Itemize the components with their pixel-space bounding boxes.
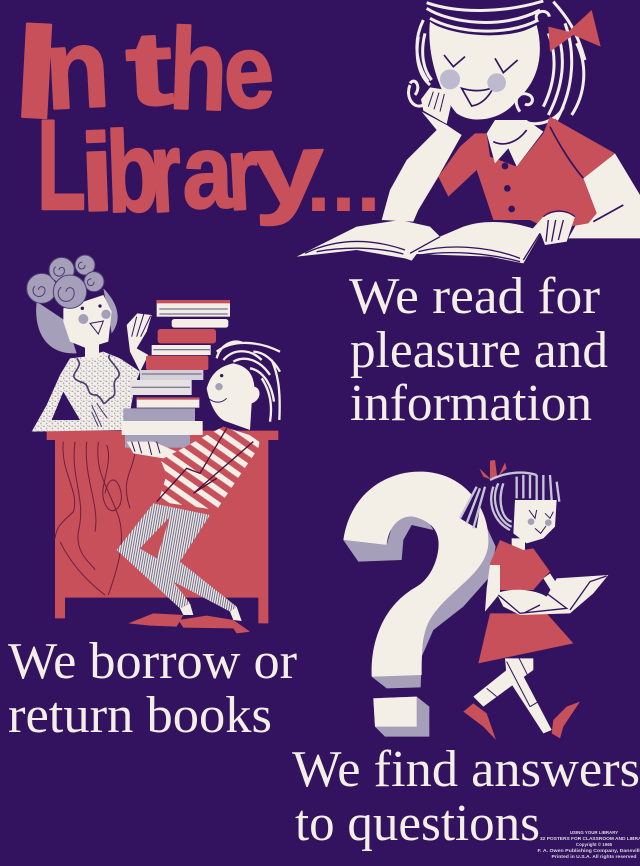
title: b [104, 107, 161, 237]
dress [438, 117, 615, 230]
copyright note: USING YOUR LIBRARY [570, 830, 618, 835]
text: we borrow [8, 633, 297, 744]
text: we borrow: We borrow or [8, 633, 297, 690]
shoes [128, 613, 183, 627]
title: r [224, 114, 261, 232]
hand on cheek [421, 87, 451, 124]
title: ... [306, 131, 381, 231]
copyright note: Printed in U.S.A. All rights reserved [552, 854, 637, 859]
question mark [343, 472, 488, 677]
bodice and skirt [478, 540, 573, 663]
text: we read: information [350, 375, 592, 432]
ribbon [479, 460, 507, 481]
buttons [502, 163, 508, 169]
title: n [42, 4, 112, 134]
stack of books [122, 300, 230, 448]
title: L [37, 93, 86, 237]
neck and collar [487, 120, 543, 167]
text: we read: We read for [349, 268, 600, 325]
eyes and mouth [444, 55, 518, 106]
question mark shadow [343, 513, 496, 688]
title: i [78, 110, 117, 234]
title: y [251, 113, 326, 227]
hair [409, 1, 585, 124]
feet [180, 603, 242, 621]
copyright note: Copyright © 1965 [576, 842, 613, 847]
text: we find [292, 741, 640, 852]
illustration: girl reading [297, 1, 640, 263]
title: a [181, 112, 234, 231]
title: h [167, 6, 230, 135]
text: we find: We find answers [292, 741, 640, 798]
text: we borrow: return books [8, 687, 272, 744]
hair [460, 472, 560, 533]
book [297, 220, 542, 263]
bow [548, 10, 601, 52]
face [513, 500, 557, 543]
text: we read: pleasure and [350, 322, 608, 379]
copyright note: F. A. Owen Publishing Company, Dansville [538, 848, 640, 853]
title: t [123, 10, 176, 129]
arm right [568, 153, 640, 238]
cheeks [440, 69, 460, 89]
teacher [27, 255, 152, 432]
illustration: question mark and girl [343, 460, 608, 740]
text: we read [349, 268, 608, 432]
boy [117, 342, 280, 633]
legs [473, 658, 552, 733]
face [429, 22, 540, 120]
copyright note [538, 830, 640, 859]
arm on cheek [382, 112, 462, 222]
question mark dot [373, 697, 429, 737]
arm and book [485, 565, 500, 612]
shoes [463, 702, 580, 740]
illustration: desk, teacher and boy [27, 255, 280, 633]
right hand [530, 212, 575, 245]
boy head [207, 363, 260, 430]
text: we find: to questions [295, 795, 540, 852]
title: r [147, 106, 184, 236]
desk [47, 431, 278, 623]
title [10, 0, 381, 237]
copyright note: 32 POSTERS FOR CLASSROOM AND LIBRARY [540, 836, 640, 841]
title: e [219, 10, 277, 131]
